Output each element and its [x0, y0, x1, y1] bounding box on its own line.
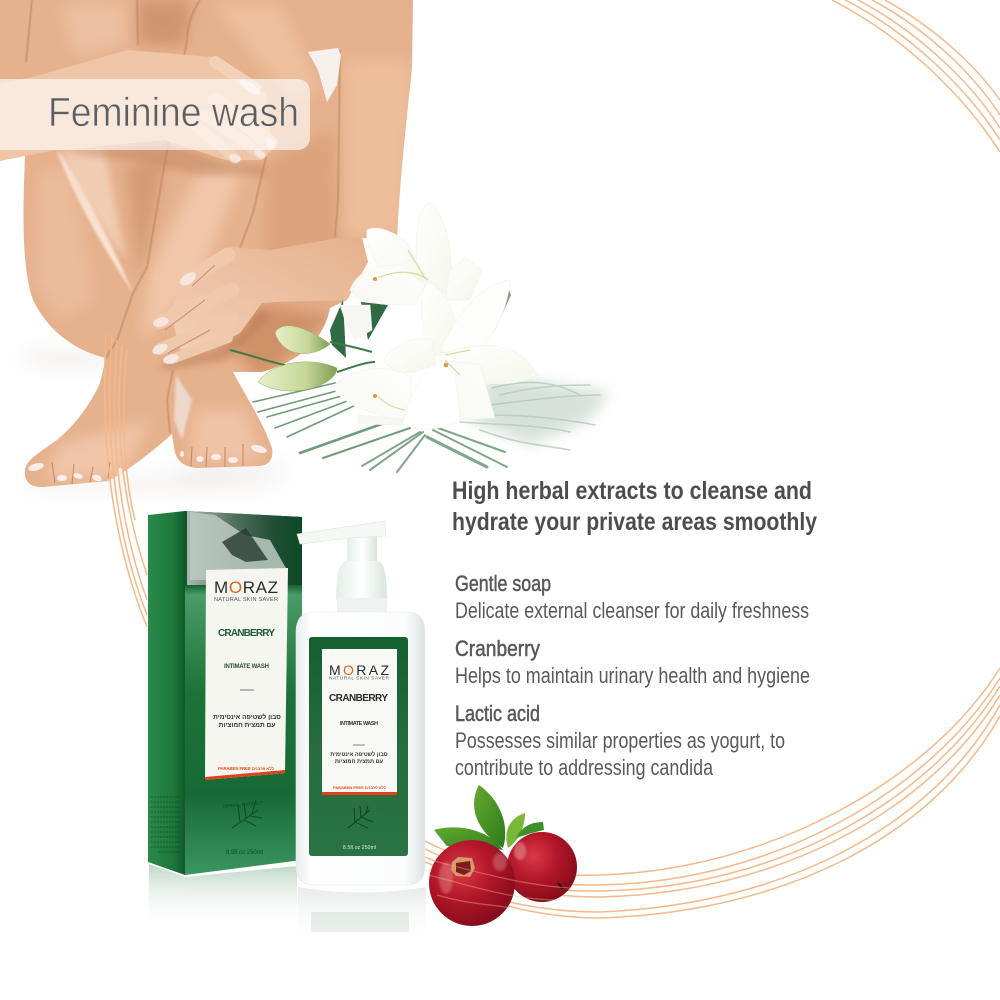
ring lines over the berries [428, 860, 570, 908]
dark leaves [330, 300, 346, 358]
box label red stripe [205, 770, 285, 780]
box tagline: NATURAL SKIN SAVER [214, 597, 278, 603]
left ring arcs [105, 335, 147, 627]
photo: woman's legs and arms [0, 0, 413, 487]
lower arm and palm [170, 238, 368, 350]
banner title: Feminine wash [48, 89, 299, 135]
product: carton box [148, 511, 302, 875]
back shin sheen [57, 150, 133, 293]
left forearm shadow [60, 142, 270, 175]
finger separations [165, 265, 215, 353]
lower-left lily [333, 368, 415, 425]
box side small text [151, 797, 180, 852]
item: lactic acid: Possesses similar properties as yogurt, to [455, 728, 785, 753]
right faded fronds [460, 382, 600, 450]
heading: hydrate your private areas smoothly [452, 508, 817, 536]
bottle herbal logo [348, 806, 373, 828]
product: bottle reflection [298, 887, 426, 945]
box hebrew description line 2: עם תמצית חמוציות [219, 722, 275, 729]
item: lactic acid: contribute to addressing candida [455, 755, 714, 780]
box white label [205, 568, 288, 780]
skin shading [35, 0, 413, 480]
lower fronds [362, 428, 507, 472]
top-right ring arcs [832, 0, 1000, 152]
toenails [27, 444, 268, 483]
lily stamens [377, 250, 470, 410]
product: pump bottle [296, 521, 425, 885]
white underwear [308, 48, 341, 102]
box volume: 8.5fl.oz 250ml [226, 850, 263, 856]
bottle white label [322, 649, 397, 795]
item: lactic acid [455, 701, 785, 780]
left berry [429, 840, 515, 926]
leaf: right [516, 822, 544, 838]
text block [452, 477, 817, 780]
item: cranberry [455, 636, 810, 688]
box photo area [187, 511, 302, 585]
forearm across the knee [0, 50, 272, 161]
lower bud [258, 362, 337, 391]
bottle tagline: NATURAL SKIN SAVER [329, 676, 390, 682]
product: carton reflection [149, 864, 297, 945]
item: cranberry: Helps to maintain urinary health and hygiene [455, 663, 810, 688]
bottle hebrew description line 2: עם תמצית חמוציות [335, 759, 384, 765]
item: gentle soap: Gentle soap [455, 571, 551, 596]
bottle volume: 8.5fl.oz 250ml [343, 845, 376, 851]
box front panel [185, 511, 302, 875]
item: cranberry: Cranberry [455, 636, 540, 661]
bottle label red stripe [322, 792, 397, 795]
box product type: INTIMATE WASH [224, 664, 269, 670]
toe separations [52, 444, 243, 484]
fingernails [151, 77, 276, 365]
bottle green label [309, 637, 408, 856]
box hebrew description: סבון לשטיפה אינטימית [213, 713, 281, 721]
leaf: small [506, 813, 525, 848]
pump head [297, 521, 386, 544]
bottle product type: INTIMATE WASH [340, 721, 378, 727]
pump collar [336, 561, 387, 600]
item: gentle soap: Delicate external cleanser for daily freshness [455, 598, 809, 623]
upper bud [275, 326, 330, 354]
heading [452, 477, 817, 536]
pump stem [347, 530, 377, 566]
leaf: left [434, 827, 503, 850]
shadow under hand [160, 305, 270, 370]
bottle hebrew description: סבון לשטיפה אינטימית [330, 751, 388, 758]
floor shadows [20, 352, 290, 489]
berry navel [451, 857, 475, 877]
box photo: hand [190, 512, 287, 580]
item: lactic acid: Lactic acid [455, 701, 540, 726]
box side panel [148, 511, 185, 875]
heading: High herbal extracts to cleanse and [452, 477, 812, 505]
lily bouquet [230, 202, 537, 429]
leaf: top [474, 785, 505, 848]
cranberries [428, 785, 577, 926]
left fronds [253, 383, 410, 458]
box herbal extract logo: HERBAL EXTRACT [223, 800, 263, 809]
faded frond haze [470, 375, 610, 445]
upper hand fingers [195, 62, 270, 158]
bottom-right ring arcs [423, 668, 1000, 918]
lower hand fingers [160, 255, 232, 359]
banner: Feminine wash [0, 79, 310, 150]
limb contour lines [26, 0, 340, 433]
item: gentle soap [455, 571, 809, 623]
bottle brand: MORAZ [329, 662, 389, 678]
bottle neck [337, 598, 387, 613]
upper lily [340, 202, 482, 340]
box product name: CRANBERRY [218, 628, 275, 639]
bottle paraben free: PARABEN FREE ללא פרבנים [333, 785, 387, 790]
foot gap highlight [174, 375, 192, 440]
bottle product name: CRANBERRY [329, 693, 388, 704]
box herbal extract logo [223, 800, 263, 828]
body silhouette [0, 0, 413, 487]
box brand: MORAZ [214, 578, 278, 597]
right berry [507, 832, 577, 902]
bottle body [296, 612, 425, 885]
box paraben free: PARABEN FREE ללא פרבנים [218, 766, 274, 771]
palm fronds [253, 375, 610, 472]
bud stems [230, 342, 375, 372]
front lily [383, 280, 537, 429]
